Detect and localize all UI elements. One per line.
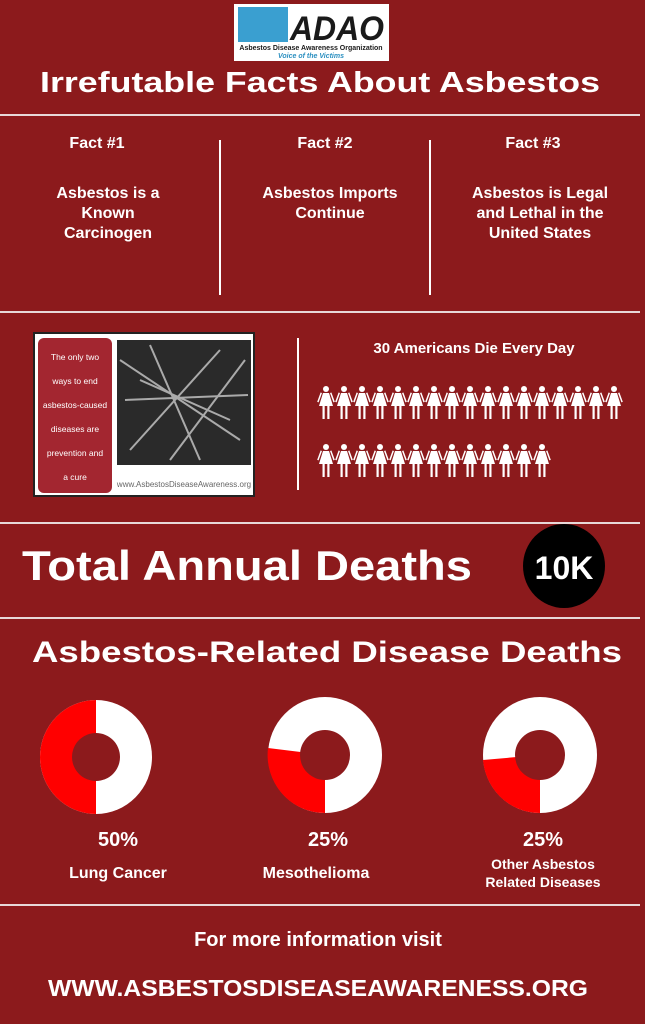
pictogram: 30 people <box>317 386 623 477</box>
logo: Voice of the Victims <box>278 53 344 60</box>
fact 2: Asbestos Imports <box>262 185 398 202</box>
total annual deaths: Total Annual Deaths <box>22 542 472 589</box>
donut 3 <box>483 697 597 813</box>
label other: 25% <box>523 829 563 851</box>
donut 2 <box>268 697 382 813</box>
photo panel: asbestos-caused <box>43 400 107 410</box>
label mesothelioma: Mesothelioma <box>263 865 369 882</box>
label other: Related Diseases <box>485 874 601 890</box>
fact 2 <box>262 135 398 222</box>
title: Irrefutable Facts About Asbestos <box>40 67 600 99</box>
photo panel <box>33 332 255 497</box>
photo panel: The only two <box>51 352 99 362</box>
fact 2: Fact #2 <box>297 135 353 152</box>
fact 3 <box>472 135 608 242</box>
fact 3: Fact #3 <box>505 135 561 152</box>
photo panel: diseases are <box>51 424 99 434</box>
footer <box>48 929 588 1001</box>
fact 1: Fact #1 <box>69 135 125 152</box>
logo: Asbestos Disease Awareness Organization <box>239 45 383 52</box>
fact 3: and Lethal in the <box>476 205 604 222</box>
label mesothelioma: 25% <box>308 829 348 851</box>
footer: For more information visit <box>194 929 442 951</box>
label lung cancer <box>69 829 167 882</box>
fact 2: Continue <box>295 205 365 222</box>
logo: ADAO <box>289 10 384 48</box>
fact 1: Known <box>81 205 135 222</box>
label lung cancer: 50% <box>98 829 138 851</box>
label other <box>485 829 601 890</box>
logo <box>234 4 389 61</box>
fact 1: Carcinogen <box>64 225 152 242</box>
label mesothelioma <box>263 829 369 882</box>
fact 1: Asbestos is a <box>56 185 160 202</box>
fact 3: Asbestos is Legal <box>472 185 608 202</box>
photo panel: a cure <box>63 472 87 482</box>
fact 1 <box>56 135 160 242</box>
photo panel: ways to end <box>51 376 98 386</box>
fact 3: United States <box>489 225 591 242</box>
badge 10K <box>523 524 605 608</box>
badge 10K: 10K <box>535 550 593 586</box>
donut 1 <box>40 700 152 814</box>
deaths per day heading: 30 Americans Die Every Day <box>373 340 575 357</box>
section title: Asbestos-Related Disease Deaths <box>32 636 622 669</box>
photo panel: www.AsbestosDiseaseAwareness.org <box>116 480 251 489</box>
footer: WWW.ASBESTOSDISEASEAWARENESS.ORG <box>48 975 588 1001</box>
label other: Other Asbestos <box>491 856 595 872</box>
photo panel: prevention and <box>47 448 103 458</box>
label lung cancer: Lung Cancer <box>69 865 167 882</box>
